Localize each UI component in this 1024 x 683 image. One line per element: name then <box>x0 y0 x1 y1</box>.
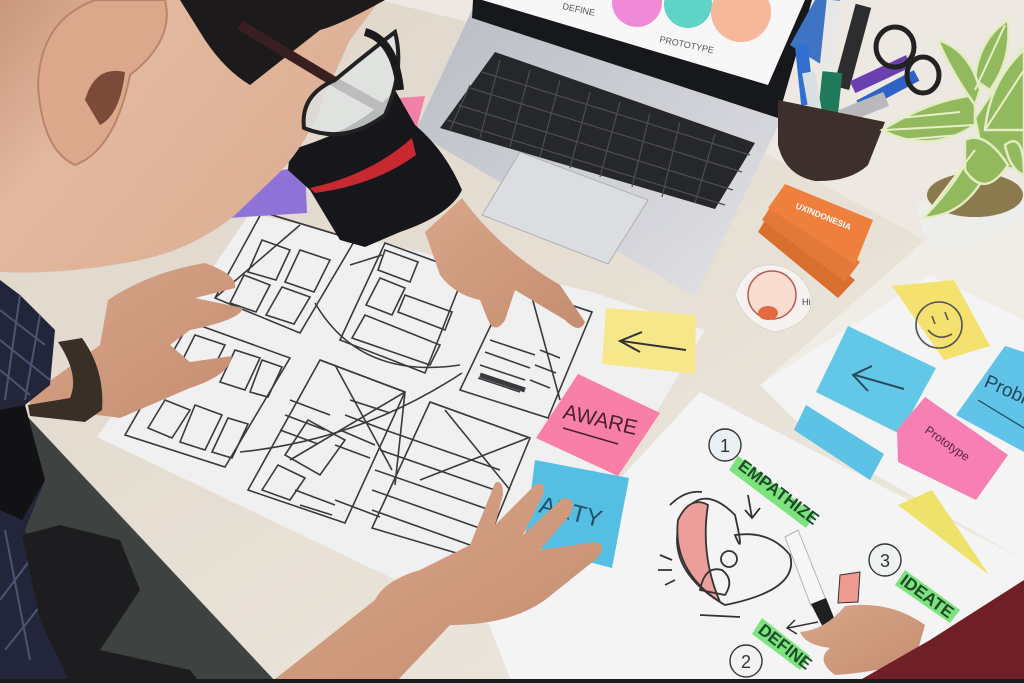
small sketch <box>838 572 860 603</box>
heart drawing <box>658 492 791 617</box>
pen cup <box>778 0 939 181</box>
design thinking sketch <box>658 429 960 677</box>
hair <box>180 0 385 85</box>
mascot sticker: Hi <box>802 297 810 307</box>
sticky note: problem <box>956 346 1024 452</box>
wireframe paper <box>97 212 705 625</box>
backpack on floor <box>22 525 200 683</box>
left hand and wrist <box>28 263 243 422</box>
sticky note: pink prototype <box>897 397 1008 500</box>
shirt plaid <box>0 295 50 660</box>
head and face <box>0 0 400 273</box>
bottom edge <box>0 679 1024 683</box>
marker and writing hand <box>785 530 925 675</box>
glasses <box>240 25 400 134</box>
wristwatch <box>28 338 102 422</box>
upper right paper <box>760 275 1024 560</box>
floor <box>0 395 277 683</box>
sticky note: blue strip <box>794 405 884 480</box>
step 3 ideate: IDEATE <box>897 571 957 622</box>
step 2 define: DEFINE <box>755 620 815 674</box>
sticky note: blue arrow <box>816 326 936 434</box>
sticky note: yellow arrow <box>602 308 696 374</box>
mascot sticker <box>735 265 812 332</box>
laptop <box>415 0 812 297</box>
potted plant <box>882 20 1024 249</box>
sticky note: aware <box>536 374 660 476</box>
ear <box>38 0 167 165</box>
screen circles: PROTOTYPE <box>659 34 715 55</box>
sticky note: blue <box>524 460 629 568</box>
screen circles: DEFINE <box>562 1 596 18</box>
sticky note: yellow triangle <box>898 490 989 575</box>
trackpad <box>482 152 648 264</box>
screen circles <box>562 0 771 55</box>
sticky note: aware: AWARE <box>561 400 640 440</box>
maroon sleeve <box>855 580 1024 683</box>
orange business cards <box>758 184 873 298</box>
shirt torso <box>0 280 80 683</box>
step 3 ideate: 3 <box>880 551 890 571</box>
step 2 define <box>730 618 818 677</box>
step 2 define: 2 <box>741 652 751 672</box>
step 3 ideate <box>869 544 960 623</box>
right paper <box>488 392 1024 683</box>
keyboard <box>440 52 755 209</box>
step 1 empathize: EMPATHIZE <box>735 456 822 529</box>
lavender sticky note <box>228 166 307 218</box>
wireframe sketches <box>125 212 592 560</box>
laptop screen <box>472 0 812 118</box>
step 1 empathize <box>709 429 822 529</box>
pointing arm and hand <box>288 90 585 328</box>
open hand <box>270 482 602 683</box>
sticky note: pink prototype: Prototype <box>922 423 973 464</box>
pink sticky note under arm <box>392 96 425 135</box>
step 1 empathize: 1 <box>720 436 730 456</box>
orange business cards: UXINDONESIA <box>794 201 853 232</box>
sticky note: blue: ARTY <box>537 492 605 533</box>
sticky note: yellow smiley <box>892 280 990 360</box>
